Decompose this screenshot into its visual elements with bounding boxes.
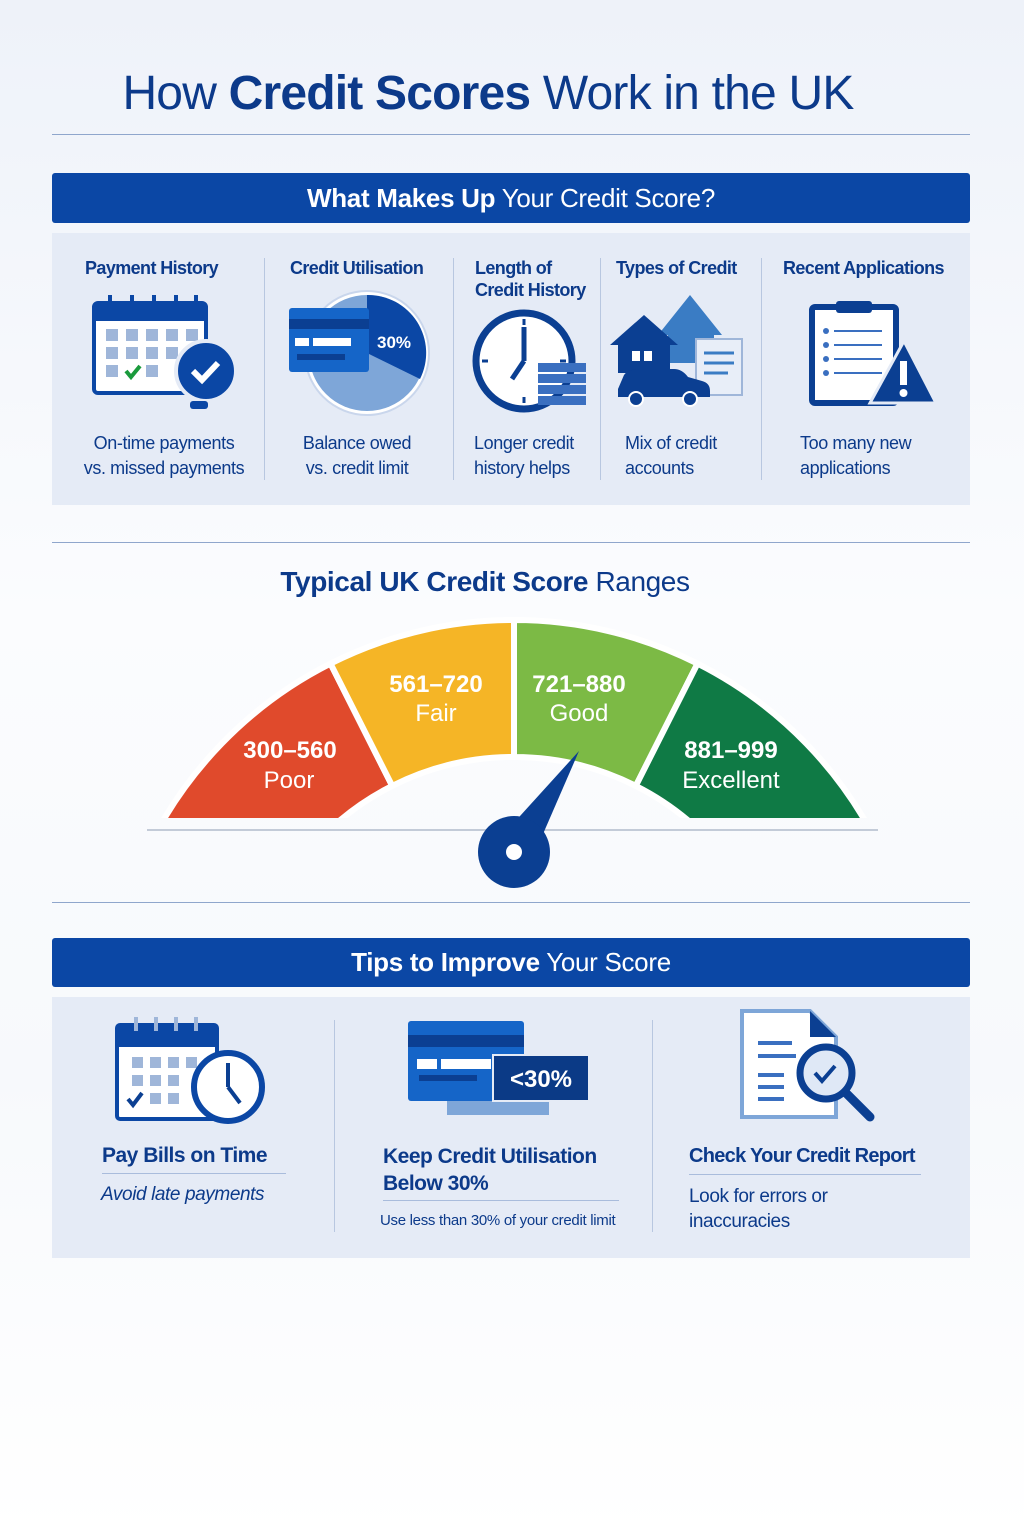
text: credit utilisation description: vs. credit limit — [306, 458, 408, 478]
icon: calendar with clock — [115, 1017, 265, 1124]
heading: typical UK credit score ranges: Typical UK Credit Score Ranges — [280, 566, 690, 597]
header: what makes up your credit score — [52, 173, 970, 223]
label: excellent: Excellent — [682, 767, 780, 794]
label: excellent: 881–999 — [684, 737, 778, 764]
label: poor: Poor — [264, 767, 314, 794]
heading: pay bills on time — [102, 1143, 286, 1174]
needle — [478, 751, 579, 888]
label: good: Good — [550, 700, 608, 727]
text: use less than 30%: Use less than 30% of your credit limit — [380, 1212, 615, 1229]
panel: credit score factors — [52, 233, 970, 505]
label: fair: 561–720 — [389, 671, 483, 698]
text: length description: history helps — [474, 458, 570, 478]
header: tips — [52, 938, 970, 987]
icon: clipboard with warning — [809, 301, 934, 406]
heading: pay bills on time: Pay Bills on Time — [102, 1144, 267, 1167]
heading: check your credit report — [689, 1143, 921, 1175]
icon: card with under 30%: <30% — [510, 1066, 572, 1093]
label: excellent — [682, 737, 780, 794]
text: look for errors — [689, 1186, 828, 1232]
icon: calendar with check — [92, 295, 234, 409]
header: what makes up your credit score: What Makes Up Your Credit Score? — [307, 183, 715, 213]
icon: card with pie chart — [289, 290, 430, 416]
label: good: 721–880 — [532, 671, 626, 698]
text: recent applications description: applications — [800, 458, 890, 478]
text: recent applications description: Too many new — [800, 433, 911, 453]
icon: clock with coins — [472, 310, 586, 412]
text: credit utilisation description — [303, 433, 411, 478]
text: payment history description: On-time payments — [94, 433, 234, 453]
heading: keep credit utilisation below 30%: Below 30% — [383, 1172, 488, 1195]
text: look for errors: Look for errors or — [689, 1186, 828, 1207]
heading: recent applications: Recent Applications — [783, 258, 944, 278]
text: types description: accounts — [625, 458, 694, 478]
heading: check your credit report: Check Your Credit Report — [689, 1145, 915, 1167]
text: payment history description — [84, 433, 244, 478]
text: types description — [625, 433, 718, 478]
heading: length of credit history — [475, 258, 586, 300]
title: How Credit Scores Work in the UK — [122, 67, 854, 120]
text: look for errors: inaccuracies — [689, 1211, 790, 1232]
label: poor — [243, 737, 337, 794]
label: poor: 300–560 — [243, 737, 337, 764]
heading: payment history: Payment History — [85, 258, 218, 278]
heading: length of credit history: Length of — [475, 258, 552, 278]
text: avoid late payments: Avoid late payments — [101, 1184, 264, 1205]
text: length description — [474, 433, 574, 478]
label: fair: Fair — [415, 700, 457, 727]
chart: credit score gauge — [147, 623, 878, 888]
heading: keep credit utilisation below 30%: Keep Credit Utilisation — [383, 1145, 597, 1168]
icon: card with under 30% — [408, 1021, 588, 1115]
header: tips: Tips to Improve Your Score — [351, 947, 671, 977]
label: fair — [389, 671, 483, 727]
icon: card with pie chart: 30% — [377, 333, 411, 352]
heading: keep credit utilisation below 30% — [383, 1143, 619, 1201]
heading: credit utilisation: Credit Utilisation — [290, 258, 423, 278]
heading: types of credit: Types of Credit — [616, 258, 737, 278]
text: recent applications description — [800, 433, 912, 478]
icon: houses and car — [610, 295, 743, 407]
text: length description: Longer credit — [474, 433, 574, 453]
panel: tips — [52, 997, 970, 1258]
text: payment history description: vs. missed payments — [84, 458, 244, 478]
heading: length of credit history: Credit History — [475, 280, 586, 300]
icon: document with magnifier — [740, 1009, 874, 1122]
text: types description: Mix of credit — [625, 433, 717, 453]
text: credit utilisation description: Balance owed — [303, 433, 411, 453]
label: good — [532, 671, 626, 727]
